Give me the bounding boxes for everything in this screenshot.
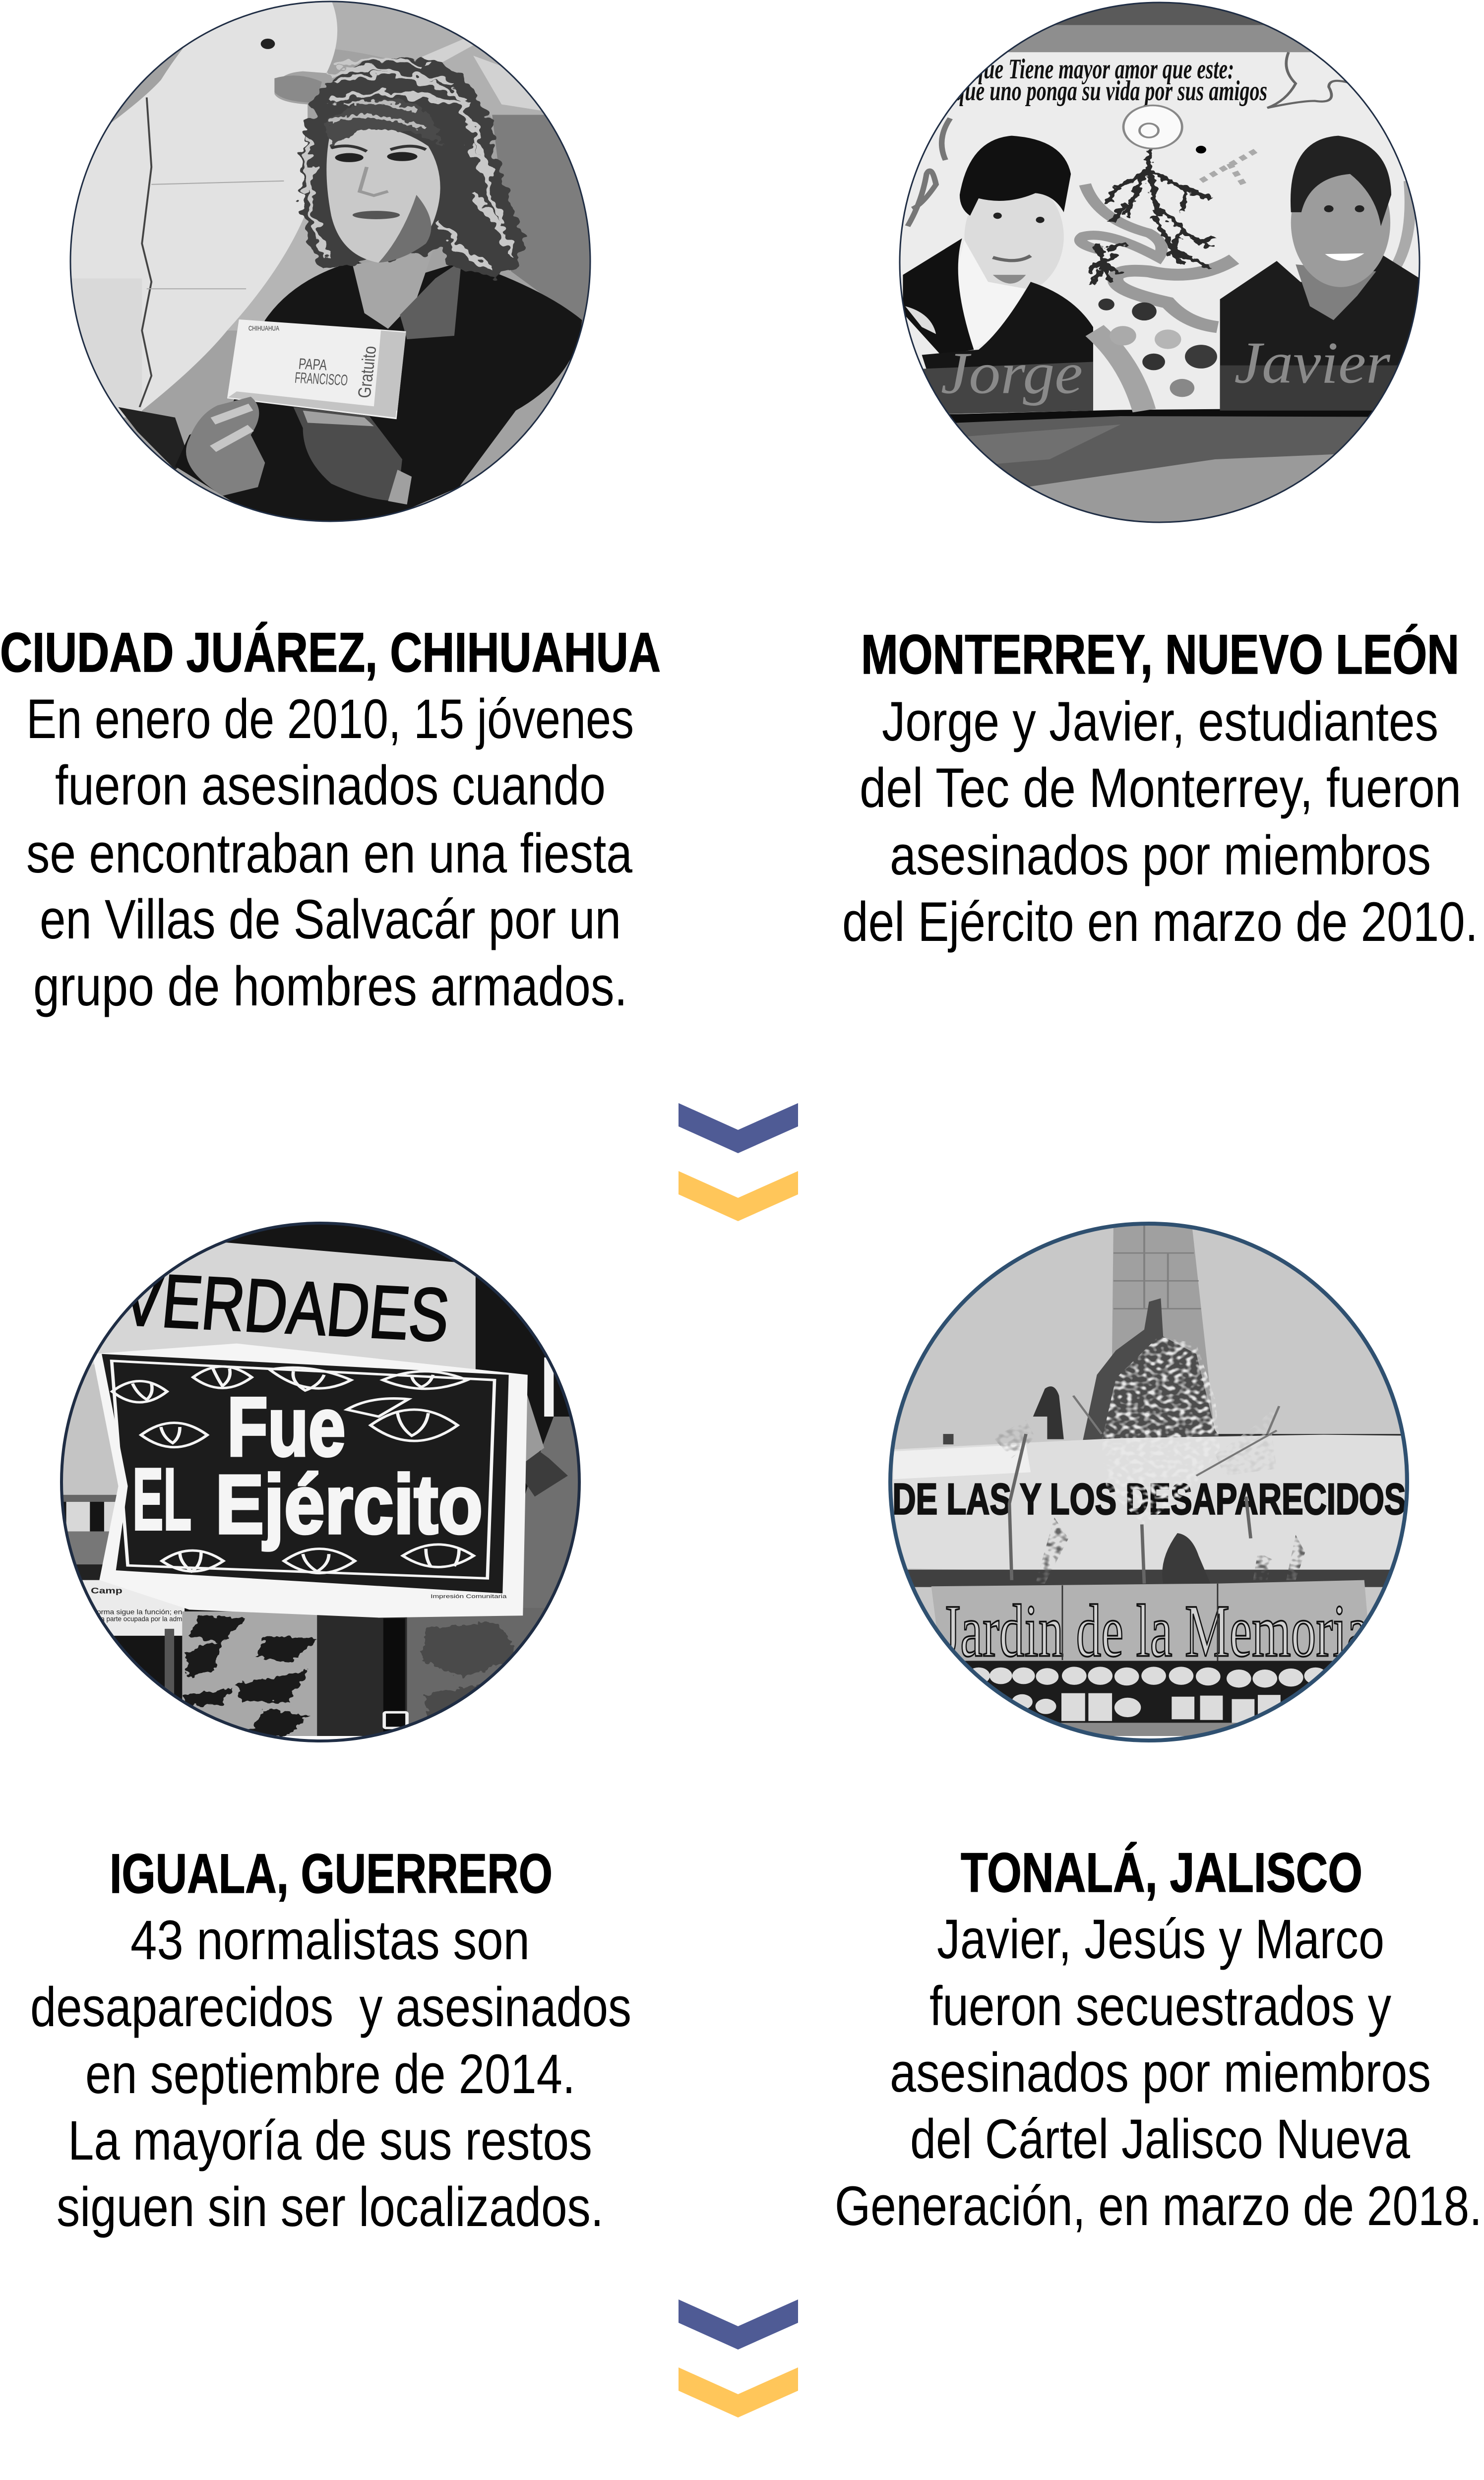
- text block: Ciudad Juárez: grupo de hombres armados.: [33, 955, 627, 1017]
- text block: Monterrey: [842, 690, 1478, 953]
- text block: Tonalá: [835, 1908, 1482, 2237]
- text block: Iguala: [30, 1909, 631, 2238]
- portrait: Javier: Javier: [1234, 330, 1391, 396]
- text block: Ciudad Juárez: fueron asesinados cuando: [55, 754, 606, 816]
- mural inscription: [957, 59, 1267, 106]
- panel: Iguala: [30, 1211, 631, 2238]
- text block: Tonalá: fueron secuestrados y: [929, 1975, 1391, 2037]
- hair: [299, 57, 525, 275]
- photo: protest sign "Fue el Ejército": [47, 1211, 615, 1741]
- mural inscription: que Tiene mayor amor que este:: [974, 53, 1234, 84]
- text block: Ciudad Juárez: En enero de 2010, 15 jóvenes: [26, 688, 634, 750]
- protest sign: EL: [132, 1450, 191, 1549]
- sign words: Fue: [227, 1380, 345, 1474]
- tree: [993, 1337, 1305, 1584]
- camouflage clothing: [165, 1608, 563, 1736]
- info panel: forma sigue la función; en: [95, 1608, 182, 1616]
- info panel: Camp: [91, 1586, 123, 1596]
- portrait: Jorge: [903, 136, 1093, 414]
- banner: [889, 1434, 1406, 1575]
- portrait: Javier: [1220, 136, 1420, 411]
- text block: Iguala: desaparecidos y asesinados: [30, 1976, 631, 2038]
- protest sign: Impresión Comunitaria: [431, 1593, 507, 1600]
- info panel: la parte ocupada por la adm: [99, 1615, 182, 1623]
- text block: Iguala: La mayoría de sus restos: [68, 2109, 592, 2171]
- arrow: double chevron 1: [679, 1103, 798, 1221]
- ticket: CHIHUAHUA: [248, 324, 279, 332]
- text block: Iguala: 43 normalistas son: [130, 1909, 530, 1971]
- ticket: [227, 319, 406, 419]
- panel: Monterrey: [842, 0, 1478, 953]
- text block: Ciudad Juárez: en Villas de Salvacár por un: [40, 888, 621, 950]
- portrait: Jorge: Jorge: [941, 340, 1083, 406]
- text block: Iguala: siguen sin ser localizados.: [57, 2176, 604, 2238]
- text block: Ciudad Juárez: [26, 688, 634, 1017]
- ticket: Gratuito: [354, 345, 380, 399]
- protest sign: [92, 1344, 528, 1617]
- arrow: double chevron 2: [679, 2299, 798, 2418]
- mural garden motif: [1080, 106, 1258, 411]
- heading: Ciudad Juárez: CIUDAD JUÁREZ, CHIHUAHUA: [0, 621, 661, 683]
- ticket: PAPA: [298, 355, 328, 373]
- heading: Tonalá: TONALÁ, JALISCO: [961, 1842, 1362, 1904]
- text block: Ciudad Juárez: se encontraban en una fiesta: [26, 822, 633, 884]
- memorial plaques: [884, 1661, 1405, 1736]
- panel: Tonalá: [835, 1211, 1482, 2237]
- photo: woman holding a ticket in front of a dove mural: [69, 1, 591, 522]
- heading: Iguala: IGUALA, GUERRERO: [110, 1843, 553, 1905]
- photo: mural of Jorge and Javier: [899, 2, 1421, 523]
- protest sign: Ejército: [215, 1458, 483, 1551]
- text block: Tonalá: Javier, Jesús y Marco: [937, 1908, 1384, 1970]
- info panel: [47, 1580, 185, 1636]
- photo: Jardín de la Memoria at a monument: [874, 1211, 1419, 1740]
- ticket: FRANCISCO: [294, 369, 349, 389]
- panel: Ciudad Juárez: [1, 1, 660, 1017]
- text block: Iguala: en septiembre de 2014.: [85, 2043, 575, 2105]
- graffiti: VERDADES: [119, 1257, 453, 1357]
